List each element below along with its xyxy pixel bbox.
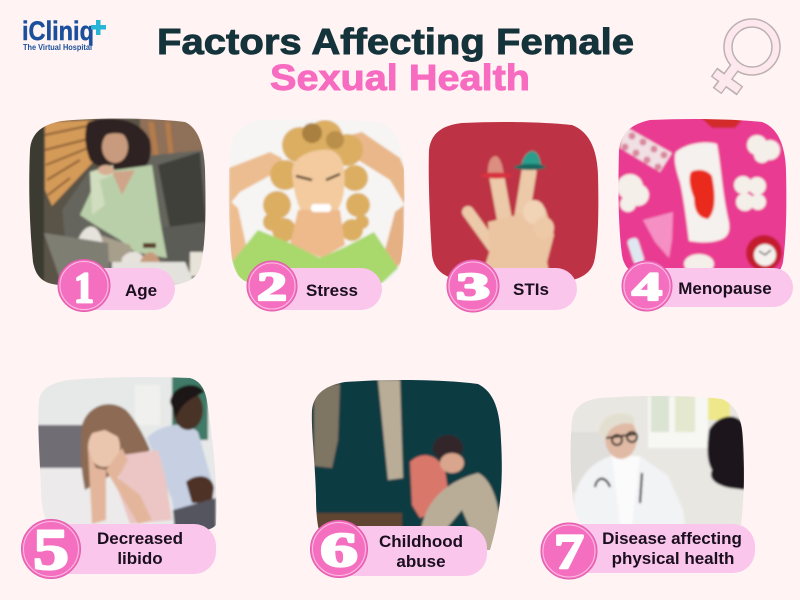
label text <box>379 532 463 571</box>
number badge: 1 <box>74 265 94 312</box>
pill label <box>62 268 175 310</box>
number badge: 4 <box>632 264 662 309</box>
photo: hand with condoms on fingers <box>426 118 601 288</box>
number badge: 7 <box>554 523 584 579</box>
title: Sexual Health <box>270 57 530 98</box>
panel: Childhood abuse <box>310 378 504 578</box>
label text: STIs <box>513 280 549 299</box>
panel: Disease affecting physical health <box>541 394 755 579</box>
label text: Decreased <box>97 529 183 548</box>
photo: stressed blonde woman <box>228 118 406 288</box>
pill label <box>255 268 382 310</box>
title: Factors Affecting Female <box>157 21 634 62</box>
panel: Stress <box>228 118 406 311</box>
photo: doctor with patient <box>568 394 746 530</box>
title <box>157 21 634 98</box>
label text: Disease affecting <box>602 529 742 548</box>
panel: Age <box>28 118 210 312</box>
panel: STIs <box>426 118 601 312</box>
panel: Menopause <box>616 117 793 311</box>
pill label <box>632 268 793 307</box>
number badge <box>310 520 368 578</box>
number badge <box>58 260 110 312</box>
number badge: 5 <box>33 517 69 582</box>
number badge <box>541 523 597 579</box>
number badge: 3 <box>456 266 490 308</box>
pill label <box>560 524 755 573</box>
panel: Decreased libido <box>22 375 220 582</box>
photo: pad, pills and cotton on pink <box>618 119 786 270</box>
number badge: 2 <box>257 264 287 309</box>
number badge <box>447 260 499 312</box>
label text: Stress <box>306 281 358 300</box>
photo: child hiding face against teal wall <box>310 378 504 553</box>
number badge: 6 <box>320 522 358 577</box>
label text: abuse <box>396 552 446 571</box>
number badge <box>22 517 80 582</box>
photo: couple sitting apart on bed <box>36 375 220 535</box>
logo: iCliniq: The Virtual Hospital <box>23 43 92 52</box>
number badge <box>622 261 672 311</box>
label text: libido <box>117 549 163 568</box>
label text: physical health <box>612 549 734 568</box>
pill label <box>42 524 216 574</box>
photo: woman with laptop on sofa <box>28 118 210 288</box>
label text: Age <box>125 281 157 300</box>
label text <box>97 529 183 568</box>
logo: iCliniq: iCliniq <box>22 16 94 46</box>
pill label <box>455 268 577 310</box>
label text: Childhood <box>379 532 463 551</box>
icon: female symbol <box>714 23 776 91</box>
pill label <box>320 526 487 576</box>
label text: Menopause <box>678 279 772 298</box>
label text <box>602 529 742 568</box>
number badge <box>247 261 297 311</box>
